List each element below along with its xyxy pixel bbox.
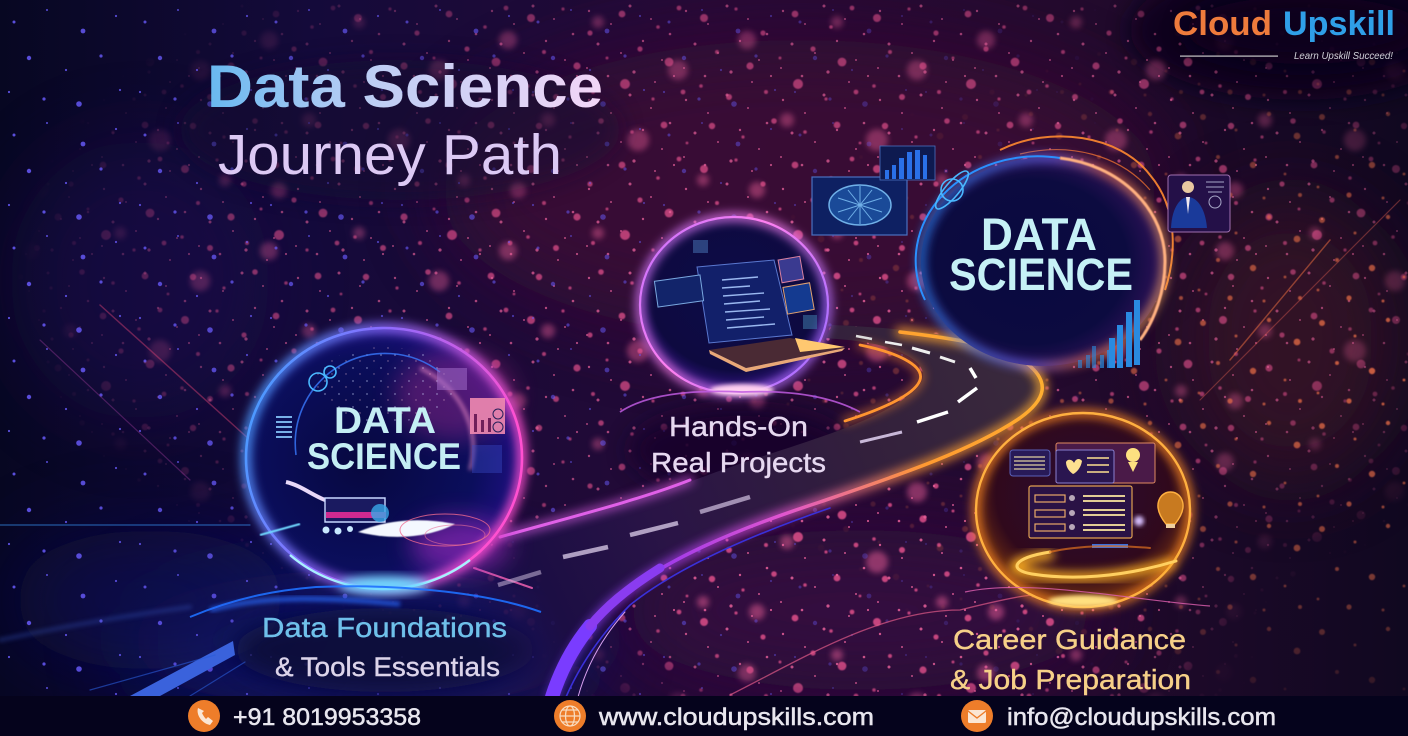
icon: orbit	[931, 167, 973, 213]
footer	[0, 696, 1408, 736]
panel: projects circle	[620, 217, 860, 412]
road lane dashes	[498, 336, 977, 585]
caption: career guidance: Career Guidance	[953, 624, 1186, 655]
arc under circle	[965, 587, 1210, 606]
icon: light bulb	[1158, 492, 1183, 528]
road inner edge	[474, 345, 921, 588]
icon: molecule	[309, 366, 336, 391]
panel: side cards	[654, 240, 817, 329]
icon: laptop	[697, 260, 845, 372]
heading: data science: DATA	[981, 209, 1097, 260]
panel: brain card	[812, 177, 907, 235]
icon: mail	[961, 700, 993, 732]
bar chart: top	[880, 146, 935, 180]
logo	[1173, 5, 1395, 62]
contact: phone number: +91 8019953358	[233, 704, 421, 731]
panel: top cards	[1010, 443, 1155, 483]
heading: data science	[307, 400, 461, 477]
caption: career guidance	[950, 624, 1191, 695]
caption: data foundations: Data Foundations	[262, 612, 507, 643]
light streaks	[0, 200, 1400, 696]
caption: hands-on	[651, 411, 826, 478]
caption: hands-on: Real Projects	[651, 447, 826, 478]
caption: career guidance: & Job Preparation	[950, 664, 1191, 695]
road outer edge	[552, 332, 1042, 697]
heading: data science: DATA	[334, 400, 436, 441]
caption: data foundations: & Tools Essentials	[275, 652, 500, 682]
panel: chart card	[437, 368, 505, 473]
caption: data foundations	[262, 612, 507, 682]
road	[440, 325, 1044, 697]
icon: spacecraft	[260, 482, 490, 546]
title line: journey path: Journey Path	[218, 123, 562, 187]
arc under circle	[620, 391, 860, 412]
caption: hands-on: Hands-On	[669, 411, 808, 442]
bar chart: growth	[1078, 300, 1140, 368]
icon: globe	[554, 700, 586, 732]
panel: person card	[1168, 175, 1230, 232]
logo tagline: Learn Upskill Succeed!	[1294, 51, 1393, 62]
panel: side list	[276, 416, 292, 438]
panel: main form card	[1029, 486, 1132, 548]
title line: data science: Data Science	[207, 53, 603, 120]
heading: data science	[949, 209, 1133, 300]
panel: foundations circle	[190, 328, 541, 617]
contact: email: info@cloudupskills.com	[1007, 704, 1276, 731]
icon: phone	[188, 700, 220, 732]
panel: career circle	[965, 413, 1210, 607]
logo wordmark: upskill: Upskill	[1283, 5, 1395, 43]
panel: data science circle	[812, 136, 1230, 368]
swirl	[1015, 546, 1176, 577]
title	[207, 53, 603, 187]
heading: data science: SCIENCE	[949, 249, 1133, 300]
logo wordmark: cloud: Cloud	[1173, 5, 1272, 43]
arcs under circle	[190, 586, 541, 617]
contact: website: www.cloudupskills.com	[598, 704, 874, 731]
heading: data science: SCIENCE	[307, 436, 461, 477]
